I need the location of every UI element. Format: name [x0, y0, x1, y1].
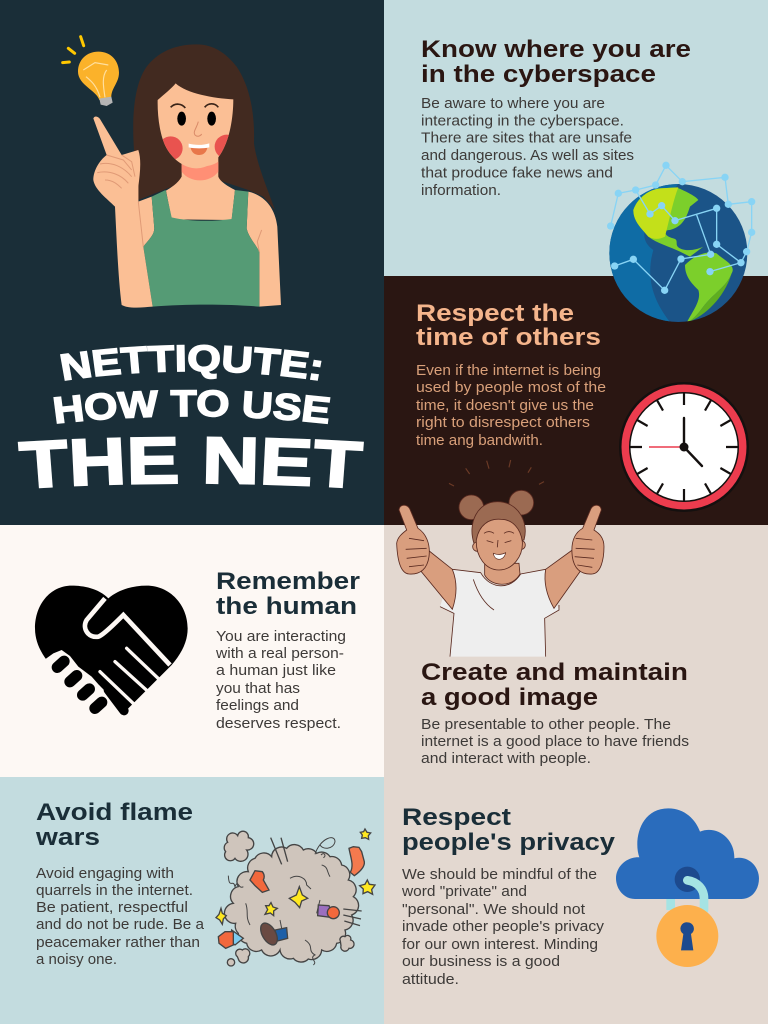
illustration: woman pointing up [93, 44, 281, 308]
text: human body: with a real person- [215, 646, 344, 662]
heading: avoid flame wars [35, 799, 193, 851]
text: cyberspace body: that produce fake news and [421, 166, 613, 182]
text: privacy body: our business is a good [402, 954, 560, 970]
text: human body [215, 629, 346, 732]
text: privacy body: word "private" and [401, 884, 527, 900]
panel: cyberspace background [384, 0, 768, 276]
text: human body: deserves respect. [216, 716, 341, 732]
heading: respect the time of others: Respect the [416, 300, 574, 327]
panel: time background [384, 276, 768, 525]
text: privacy body: attitude. [402, 972, 459, 988]
text: flame wars body: peacemaker rather than [36, 935, 200, 951]
text: time body [416, 363, 606, 449]
heading: create and maintain a good image: Create and maintain [421, 659, 688, 686]
icon: wall clock [619, 382, 749, 512]
title line 1: NETTIQUTE: [60, 344, 322, 381]
heading: remember the human: Remember [216, 568, 361, 595]
heading: remember the human [216, 568, 361, 620]
heading: respect people's privacy [402, 804, 615, 856]
title line 2: HOW TO USE [53, 390, 330, 424]
text: flame wars body: a noisy one. [36, 952, 117, 968]
text: cyberspace body: interacting in the cyberspace. [421, 114, 624, 130]
text: privacy body: "personal". We should not [402, 902, 585, 918]
icon: cloud with padlock [616, 808, 759, 967]
text: flame wars body [36, 866, 205, 968]
text: human body: a human just like [216, 663, 336, 679]
icon: handshake heart [35, 586, 188, 720]
heading: avoid flame wars: wars [35, 824, 100, 851]
illustration: fight cloud [216, 829, 375, 966]
text: time body: right to disrespect others [416, 415, 590, 431]
icon: light bulb [63, 37, 119, 106]
text: human body: You are interacting [216, 629, 346, 645]
text: time body: used by people most of the [416, 380, 606, 396]
text: privacy body: invade other people's privacy [402, 919, 605, 935]
text: cyberspace body: Be aware to where you are [421, 96, 605, 112]
text: cyberspace body: information. [421, 183, 501, 199]
panel: flame wars background [0, 777, 384, 1024]
text: privacy body [401, 867, 605, 988]
text: image body: and interact with people. [421, 751, 591, 767]
heading: respect the time of others: time of others [416, 324, 601, 351]
heading: create and maintain a good image [421, 659, 688, 711]
text: cyberspace body: and dangerous. As well as sites [421, 148, 634, 164]
text: flame wars body: and do not be rude. Be a [36, 917, 205, 933]
text: flame wars body: quarrels in the internet. [36, 883, 193, 899]
text: cyberspace body [421, 96, 634, 199]
heading: avoid flame wars: Avoid flame [36, 799, 193, 826]
title [18, 344, 364, 488]
text: human body: you that has [216, 681, 300, 697]
text: privacy body: We should be mindful of the [402, 867, 597, 883]
heading: create and maintain a good image: a good image [421, 684, 598, 711]
heading: respect people's privacy: people's privacy [402, 829, 615, 856]
illustration: girl thumbs up [397, 460, 604, 657]
heading: know where you are [421, 36, 691, 88]
text: time body: time ang bandwith. [416, 433, 543, 449]
title line 3: THE NET [18, 436, 364, 488]
text: flame wars body: Avoid engaging with [36, 866, 174, 882]
heading: remember the human: the human [216, 593, 357, 620]
text: privacy body: for our own interest. Minding [402, 937, 598, 953]
heading: respect the time of others [416, 300, 601, 351]
text: cyberspace body: There are sites that are unsafe [421, 130, 632, 146]
heading: know where you are: in the cyberspace [421, 61, 656, 88]
heading: respect people's privacy: Respect [402, 804, 511, 831]
text: image body [421, 717, 689, 767]
text: image body: internet is a good place to have friends [421, 734, 689, 750]
text: time body: time, it doesn't give us the [416, 398, 594, 414]
panel: image and privacy background [384, 525, 768, 1024]
text: human body: feelings and [216, 698, 299, 714]
panel: human background [0, 525, 384, 777]
icon: globe with network [607, 162, 755, 323]
text: image body: Be presentable to other people. The [421, 717, 671, 733]
text: time body: Even if the internet is being [416, 363, 601, 379]
text: flame wars body: Be patient, respectful [36, 900, 188, 916]
panel: hero background [0, 0, 384, 525]
heading: know where you are: Know where you are [421, 36, 691, 63]
